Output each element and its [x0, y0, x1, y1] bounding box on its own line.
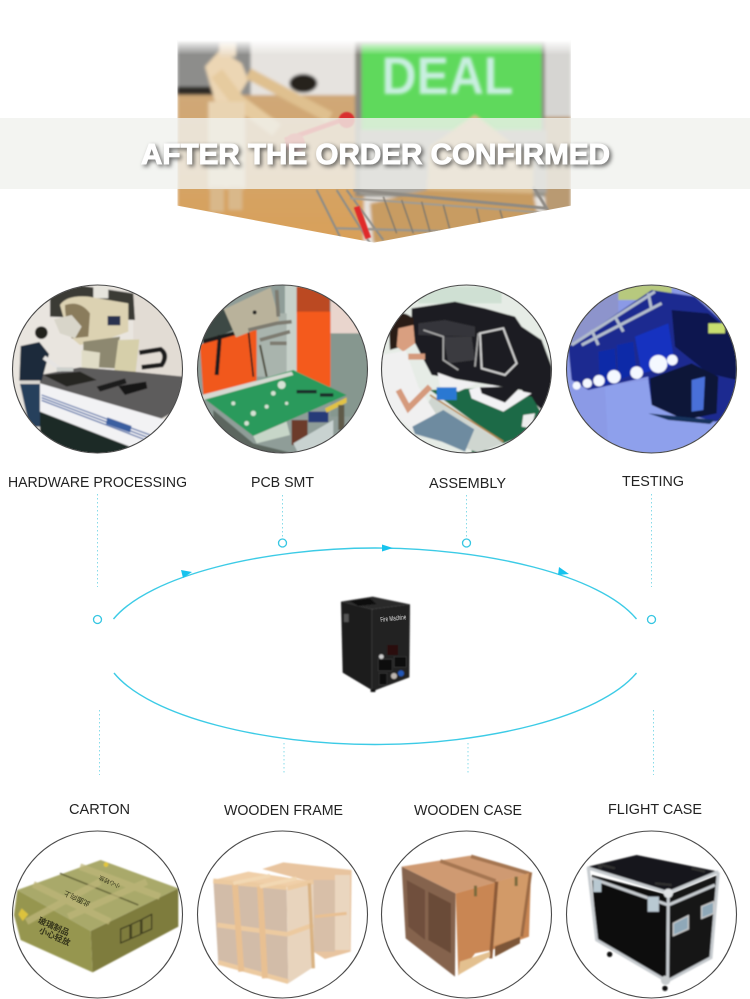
- title banner: [0, 118, 750, 189]
- photo: testing: [563, 283, 740, 457]
- label: PCB SMT: PCB SMT: [251, 474, 314, 491]
- label: wooden frame: WOODEN FRAME: [224, 802, 343, 819]
- lower arc: [114, 673, 636, 744]
- arrow 1: [181, 570, 192, 578]
- process cycle diagram: [94, 494, 656, 775]
- hero photo: shopping cart and DEAL screen: [177, 40, 571, 243]
- carton markings: 小心轻放: [38, 925, 73, 948]
- photo: wooden case: [402, 856, 531, 977]
- photo: flight case: [587, 855, 718, 991]
- product lettering: Fire Machine: [380, 614, 407, 624]
- photo: PCB SMT: [195, 283, 372, 457]
- step labels: production: [8, 473, 684, 492]
- photo: assembly: [378, 283, 555, 457]
- photo: wooden frame crates: [213, 862, 352, 983]
- carton markings: 玻璃制品: [37, 915, 71, 938]
- hero photo: shopping cart and DEAL screen: DEAL: [382, 47, 513, 106]
- arrow 2: [382, 544, 393, 552]
- photo: hardware processing: [10, 283, 187, 457]
- title: AFTER THE ORDER CONFIRMED: [141, 139, 610, 171]
- step labels: packaging: [69, 801, 702, 819]
- label: hardware processing: HARDWARE PROCESSING: [8, 474, 187, 491]
- label: wooden case: WOODEN CASE: [414, 802, 522, 819]
- label: assembly: ASSEMBLY: [429, 475, 506, 492]
- carton markings: 此面向上: [62, 889, 92, 909]
- carton markings: [37, 873, 121, 948]
- arrow 3: [558, 567, 569, 575]
- product: flame machine: [341, 597, 410, 692]
- circle outlines: [12, 285, 736, 998]
- upper arc: [114, 548, 636, 619]
- label: carton: CARTON: [69, 801, 130, 818]
- node markers: [94, 539, 656, 624]
- carton markings: 小心轻放: [97, 873, 121, 890]
- label: testing: TESTING: [622, 473, 684, 490]
- photo: carton: [14, 860, 178, 972]
- label: flight case: FLIGHT CASE: [608, 801, 702, 818]
